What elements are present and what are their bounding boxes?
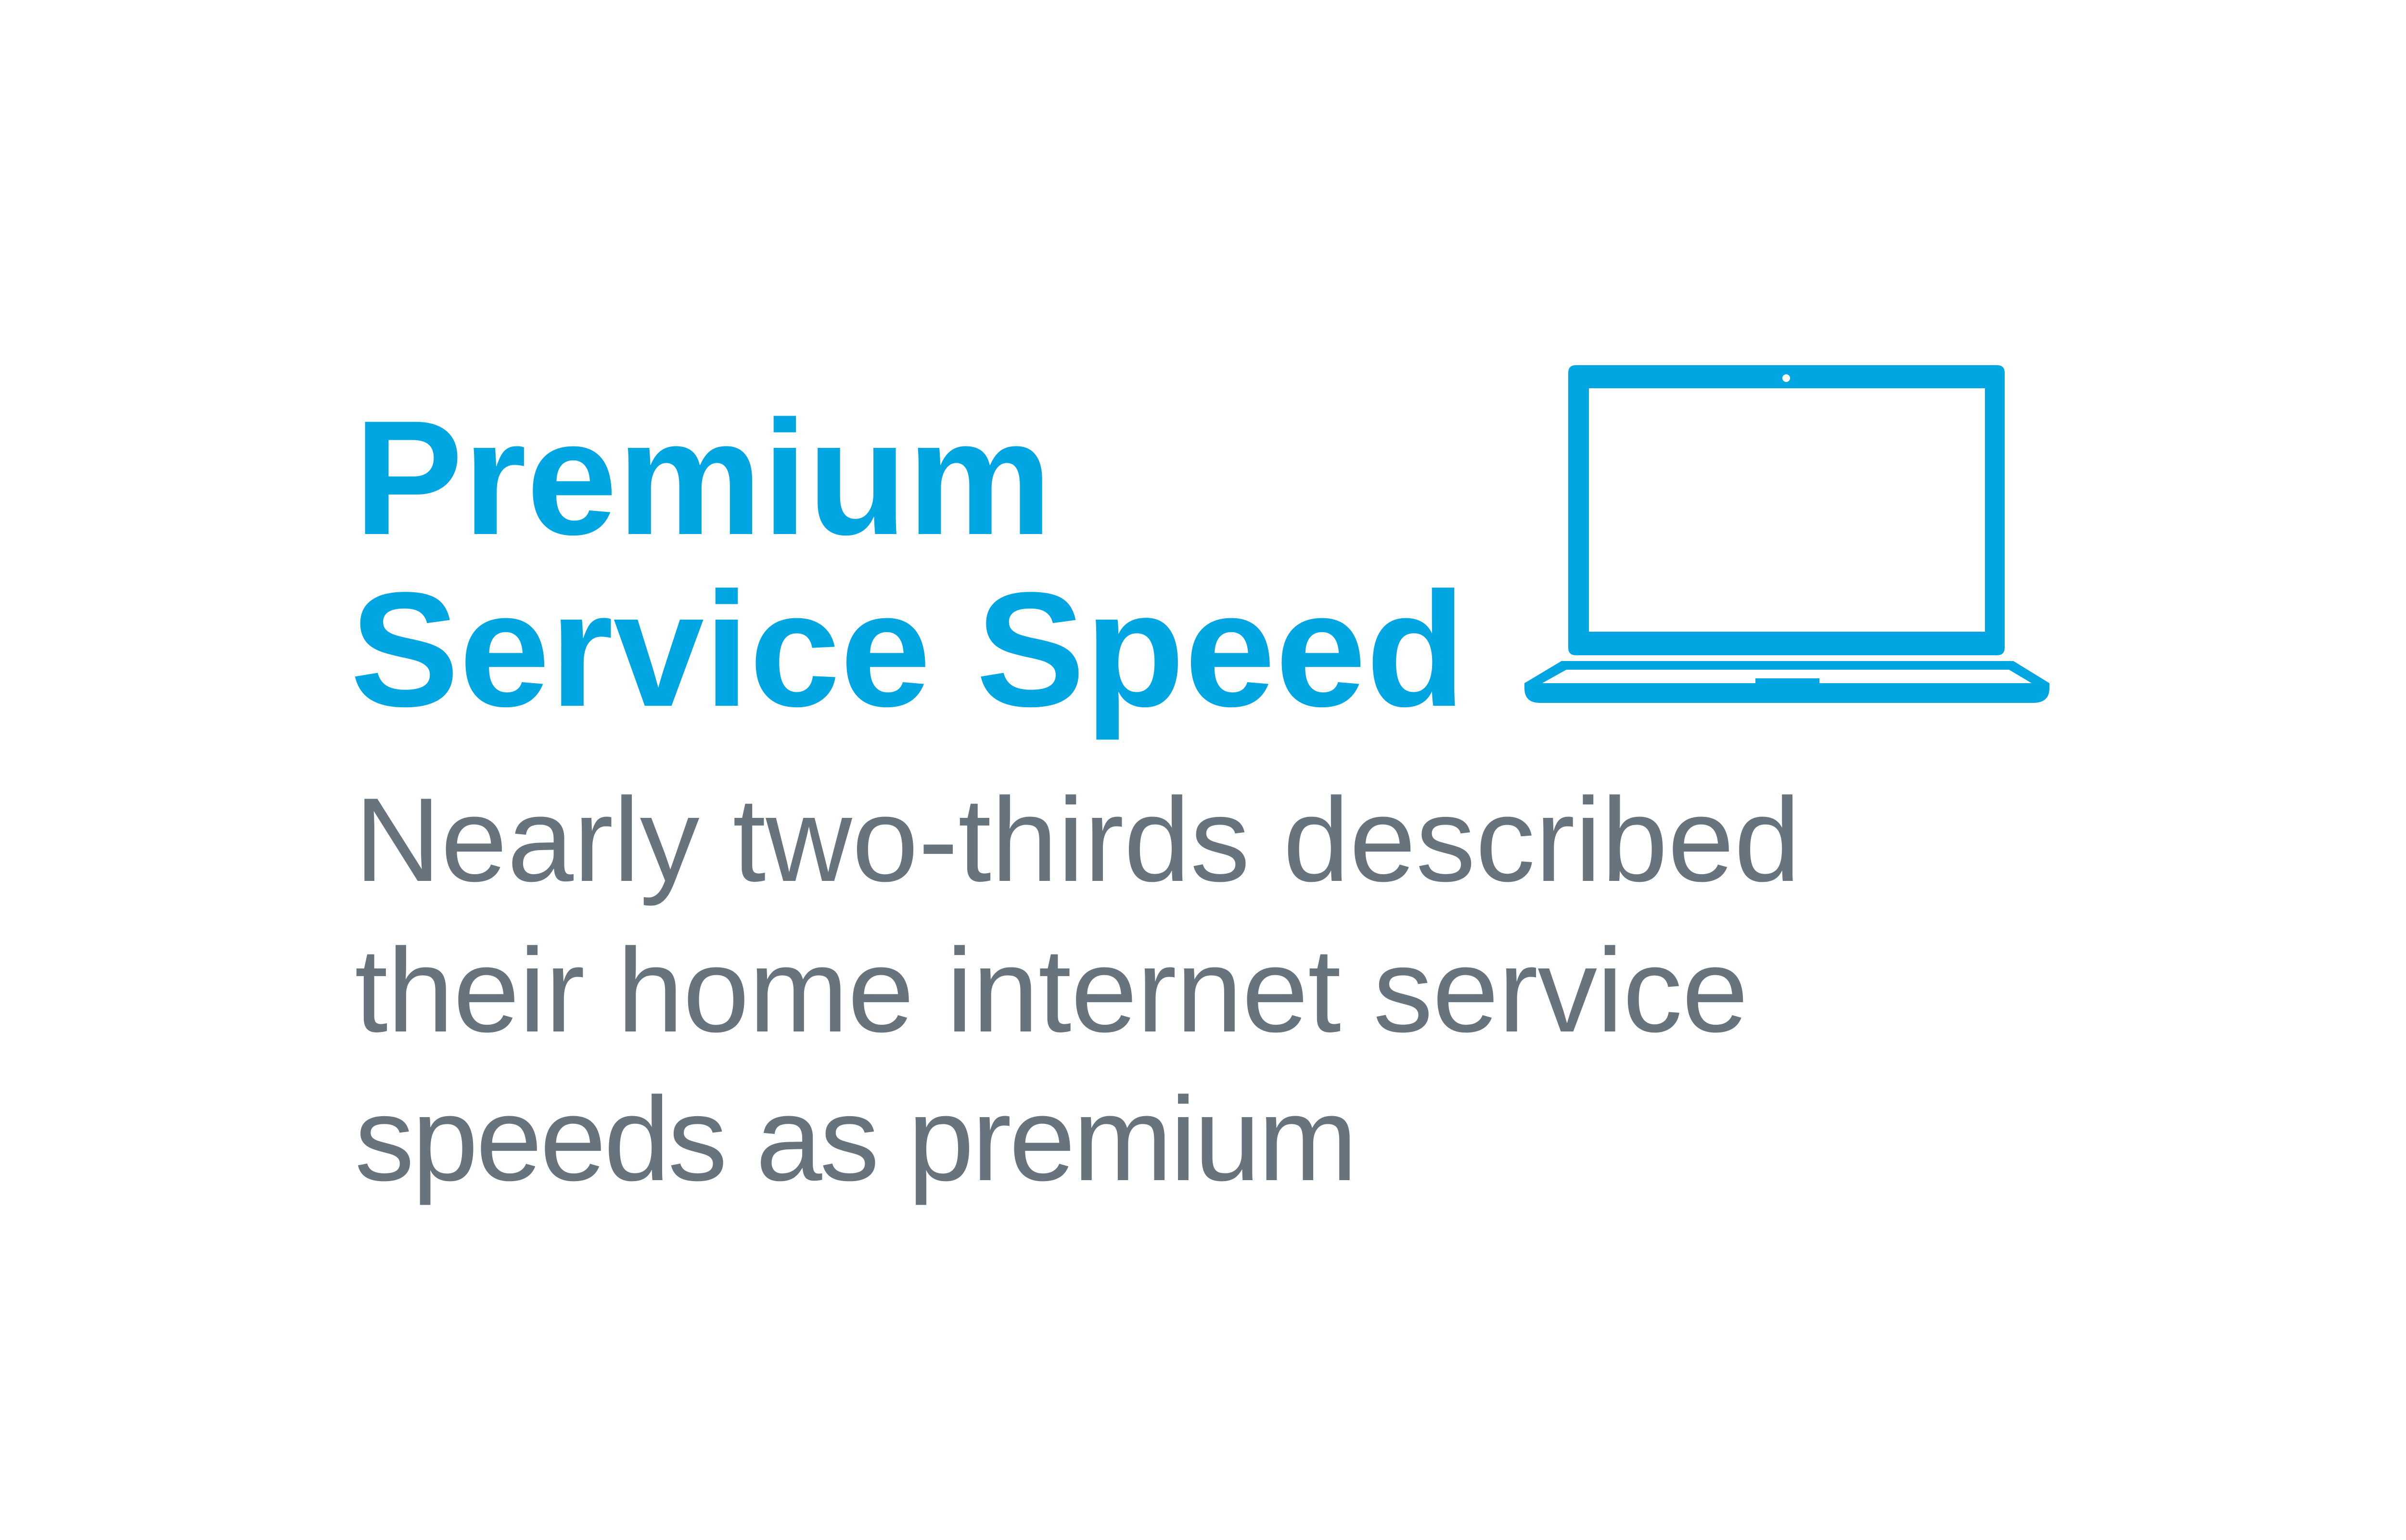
title line 2: Service Speed [350, 558, 1466, 740]
laptop base [1524, 661, 2049, 703]
body line 1: Nearly two-thirds described [355, 773, 1801, 906]
laptop screen [1568, 365, 2005, 655]
title: Premium [354, 386, 1052, 569]
body text [351, 770, 1843, 1212]
body line 2: their home internet service [355, 923, 1748, 1057]
body line 3: speeds as premium [355, 1072, 1355, 1206]
